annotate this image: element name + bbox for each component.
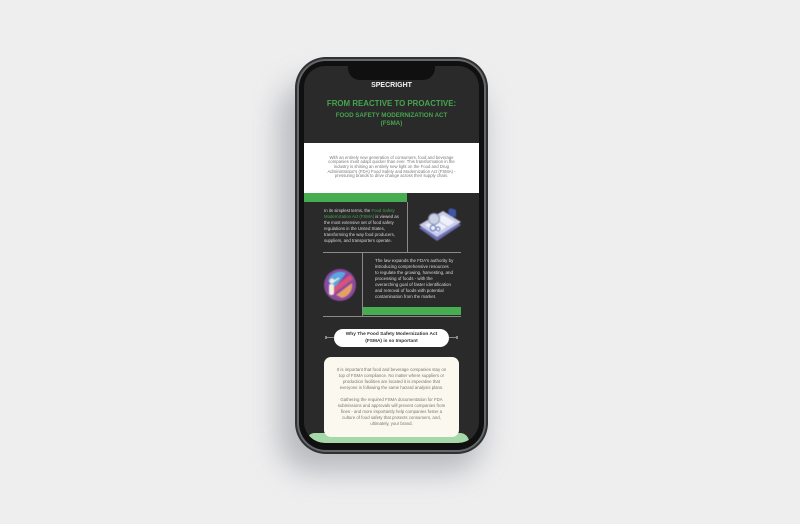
title: FROM REACTIVE TO PROACTIVE: <box>327 99 456 108</box>
connector left <box>325 336 334 339</box>
icon: food science circle <box>324 268 356 302</box>
intro text: With an entirely new generation of consumers, food and beverage <box>329 154 454 160</box>
metal ring <box>297 59 486 452</box>
phone mockup <box>295 57 488 454</box>
card text: culture of food safety that protects consumers, and, <box>342 415 441 420</box>
text: law expands: processing of foods - with the <box>375 276 433 281</box>
intro text: companies must adapt quicker than ever. This transformation in the <box>328 159 455 164</box>
text: simplest terms <box>324 208 399 243</box>
card text: fines - and more importantly help companies foster a <box>341 409 442 414</box>
text: simplest terms: the most extensive set of food safety <box>324 220 394 225</box>
icon: document with magnifier <box>418 208 462 242</box>
text: law expands: and removal of foods with potential <box>375 288 444 293</box>
white intro panel <box>304 143 479 193</box>
green bar bottom <box>363 307 461 315</box>
subtitle: (FSMA) <box>381 120 402 127</box>
card text: production facilities are located it is imperative that <box>343 379 440 384</box>
text: law expands: The law expands the FDA's authority by <box>375 258 453 263</box>
light green card behind <box>306 433 469 443</box>
heading text: (FSMA) is so Important <box>365 339 418 344</box>
subtitle <box>336 112 448 127</box>
intro text: pressuring brands to drive change across their supply chain. <box>335 173 448 178</box>
phone bezel <box>299 61 484 450</box>
intro text <box>327 154 456 178</box>
phone drop shadow <box>279 82 483 472</box>
dividers <box>407 202 408 252</box>
notch <box>348 63 435 80</box>
connector right <box>449 336 458 339</box>
intro text: Administration's (FDA) Food Safety and Modernization Act (FSMA) - <box>327 169 456 174</box>
heading text <box>346 332 438 344</box>
card text: submissions and approvals will prevent companies from <box>338 403 445 408</box>
text: simplest terms: regulations in the United States, <box>324 226 385 231</box>
card text <box>337 367 446 426</box>
text: simplest terms: In its simplest terms, the Food Safety <box>324 208 395 213</box>
text: simplest terms: suppliers, and transporters operate. <box>324 238 392 243</box>
text: simplest terms: transforming the way food producers, <box>324 232 395 237</box>
text: law expands: overarching goal of faster identification <box>375 282 451 287</box>
subtitle: FOOD SAFETY MODERNIZATION ACT <box>336 112 447 119</box>
card text: top of FSMA compliance. No matter where suppliers or <box>339 373 444 378</box>
card text: ultimately, your brand. <box>370 421 413 426</box>
text: simplest terms: Modernization Act (FSMA) is viewed as <box>324 214 399 219</box>
text: law expands: to regulate the growing, harvesting, and <box>375 270 453 275</box>
text: law expands: introducing comprehensive resources <box>375 264 449 269</box>
green bar top <box>304 193 407 202</box>
heading text: Why The Food Safety Modernization Act <box>346 332 437 337</box>
card text: Gathering the required FSMA documentation for FDA <box>340 397 443 402</box>
card text: everyone is following the same hazard analysis plans. <box>340 385 443 390</box>
intro text: industry is shining an entirely new light on the Food and Drug <box>334 164 449 169</box>
text: law expands <box>375 258 454 299</box>
screen <box>304 66 479 443</box>
logo: SPECRIGHT <box>371 82 412 89</box>
card text: It is important that food and beverage companies stay on <box>337 367 446 372</box>
text: law expands: contamination from the market. <box>375 294 436 299</box>
importance card <box>324 357 459 437</box>
heading pill <box>334 329 449 347</box>
